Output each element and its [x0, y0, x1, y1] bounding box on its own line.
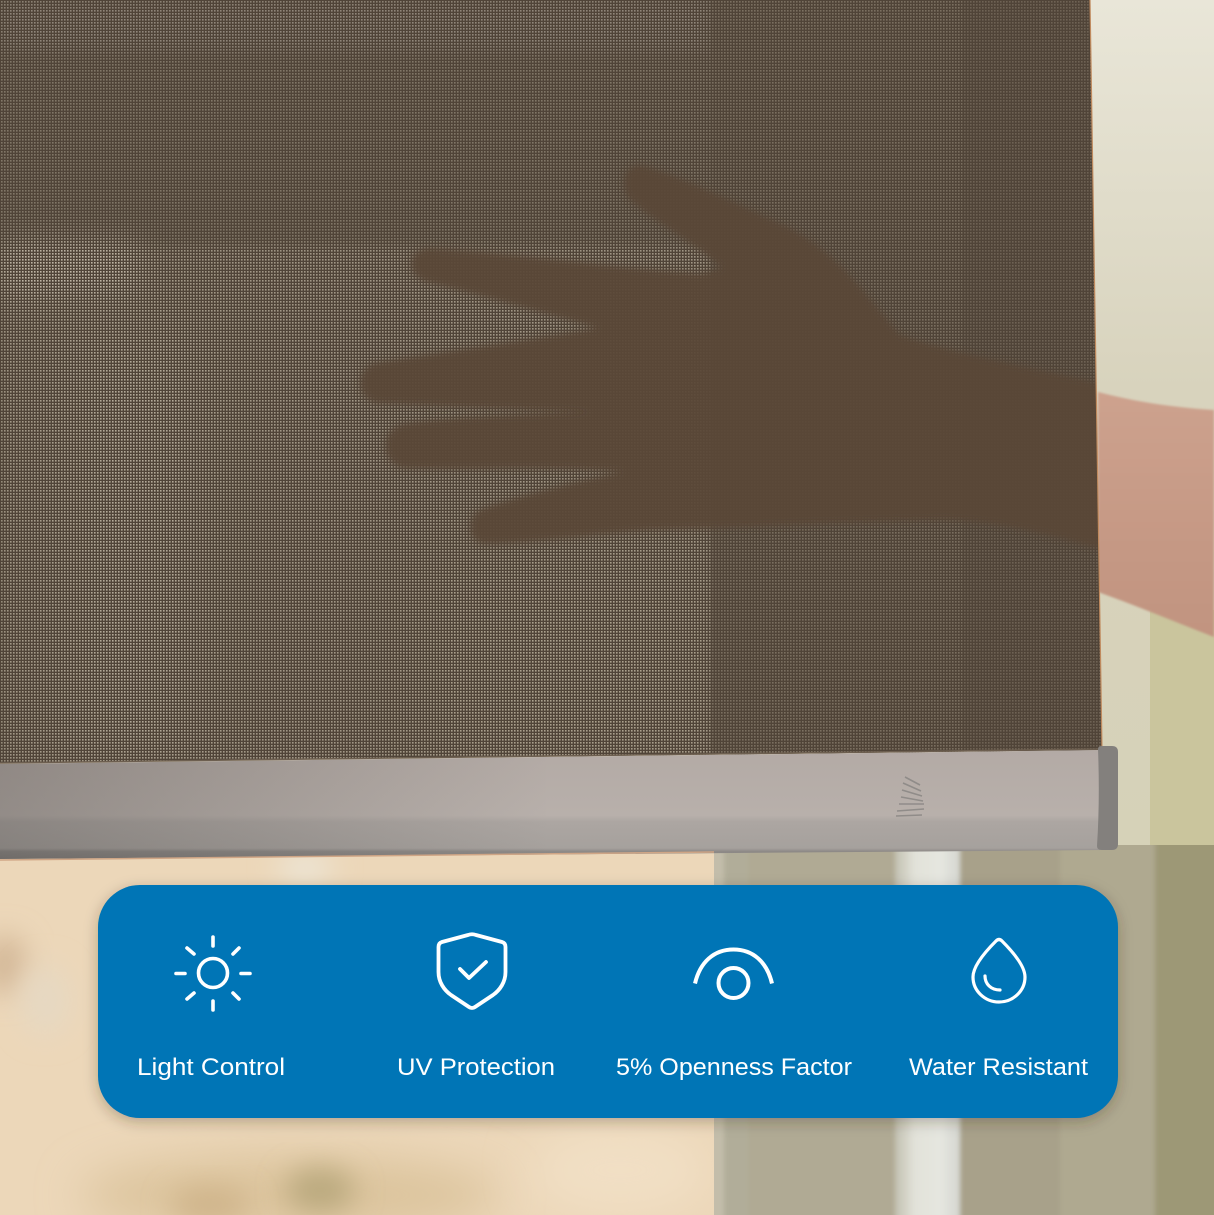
- hand silhouette: [360, 165, 1110, 552]
- label: Water Resistant: Water Resistant: [909, 1054, 1088, 1081]
- light seen through the fabric: [0, 0, 1110, 770]
- feature card shadow: [98, 889, 1118, 1122]
- rail logo mark: [896, 777, 924, 816]
- window frame background: [1085, 0, 1214, 860]
- fabric weave: [0, 0, 1110, 770]
- label: Light Control: Light Control: [137, 1054, 285, 1081]
- icon: shield with check: [438, 934, 506, 1008]
- feature card: [98, 885, 1118, 1118]
- bottom rail: [0, 746, 1118, 860]
- icon: water drop: [973, 940, 1025, 1002]
- label: 5% Openness Factor: 5% Openness Factor: [616, 1054, 852, 1081]
- rail end cap: [1097, 746, 1118, 850]
- shade edge highlight: [1090, 0, 1102, 750]
- window frame below the shade: [710, 840, 1214, 1215]
- outdoor view below the shade: [0, 845, 714, 1215]
- arm reaching behind the shade: [1098, 392, 1214, 637]
- label: UV Protection: UV Protection: [397, 1054, 555, 1081]
- shade fabric: [0, 0, 1110, 770]
- icon: sun: [176, 937, 250, 1010]
- icon: openness arc and circle: [695, 950, 772, 998]
